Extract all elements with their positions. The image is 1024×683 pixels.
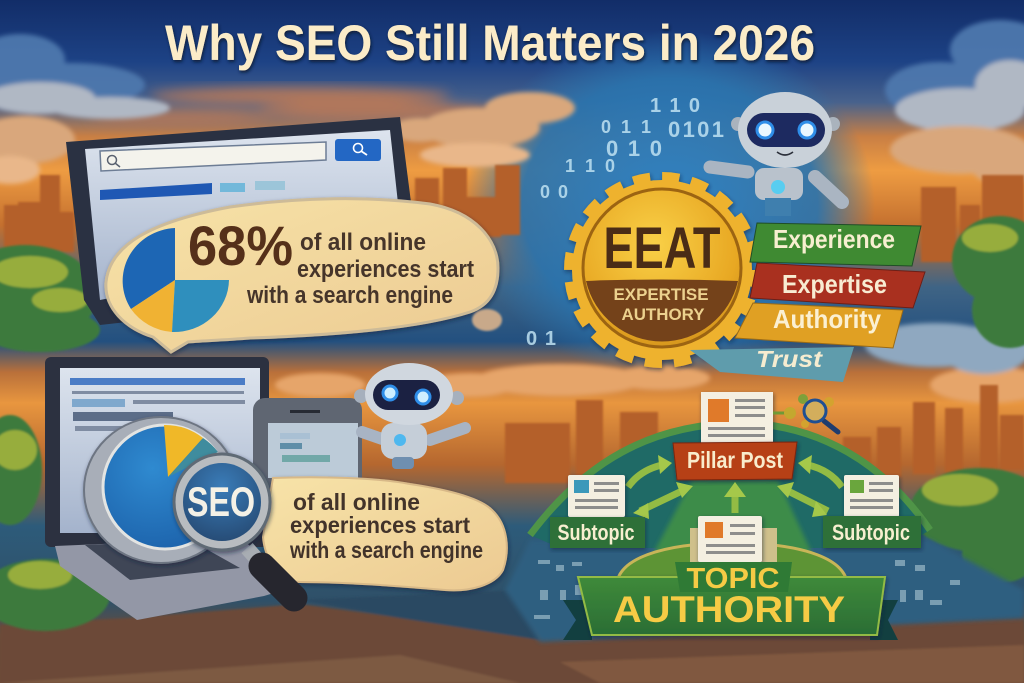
small cloud	[472, 309, 502, 331]
statistic caption	[289, 489, 483, 563]
panel: SEO devices	[45, 357, 507, 620]
icon: search button	[335, 139, 381, 161]
gold seal	[570, 178, 754, 362]
ribbon: Authority	[735, 303, 903, 348]
document: subtopic right	[844, 475, 899, 517]
document: pillar	[701, 392, 773, 444]
statistic caption: experiences start	[297, 256, 474, 283]
ribbon: Experience	[750, 223, 921, 266]
magnifier handle	[247, 548, 294, 598]
banner: topic authority: AUTHORITY	[613, 589, 845, 630]
binary digits: 0 0	[540, 182, 568, 202]
laptop	[45, 357, 300, 620]
statistic caption: with a search engine	[289, 537, 483, 563]
title: Why SEO Still Matters in 2026	[165, 15, 815, 71]
panel: search statistic	[66, 117, 502, 352]
background: city skyline	[4, 165, 1024, 483]
ribbon: Trust: Trust	[756, 346, 824, 372]
panel: topic cluster	[505, 392, 1024, 642]
green hill	[530, 423, 930, 548]
binary digits: 0 1 1	[601, 117, 651, 137]
phone	[253, 398, 362, 488]
center green glow	[650, 480, 815, 560]
background: sunset streaks	[90, 87, 500, 125]
SEO lens	[174, 454, 270, 550]
green arc	[617, 543, 847, 585]
gold seal: EXPERTISE	[614, 285, 708, 304]
banner: topic authority: TOPIC	[686, 563, 780, 595]
speech bubble	[106, 199, 498, 352]
gold seal: AUTHORY	[622, 305, 705, 324]
arrows	[628, 455, 842, 519]
statistic caption	[246, 229, 474, 309]
statistic caption: with a search engine	[246, 282, 453, 309]
pie chart	[123, 228, 229, 332]
statistic caption: experiences start	[290, 512, 470, 538]
banner: topic authority	[563, 562, 898, 640]
monitor with search page	[66, 117, 415, 325]
pie magnifier	[84, 417, 238, 563]
binary digits	[526, 95, 724, 350]
binary digits: 0 1	[526, 328, 556, 350]
binary digits: 0 1 0	[606, 136, 662, 161]
speech bubble	[263, 477, 507, 590]
label: Pillar Post	[673, 442, 797, 480]
document: center	[698, 516, 762, 562]
statistic caption: of all online	[293, 489, 420, 515]
panel: EEAT badge and ribbons	[570, 178, 925, 382]
label: Subtopic right: Subtopic	[832, 520, 910, 545]
circuit ground	[505, 540, 1024, 642]
background: digital glow	[465, 30, 875, 380]
ribbon: Expertise: Expertise	[782, 269, 887, 299]
ribbon: Experience: Experience	[773, 224, 895, 254]
background: paved ground	[0, 590, 1024, 683]
binary digits: 1 1 0	[650, 95, 700, 117]
document: subtopic left	[568, 475, 625, 517]
ribbon: Trust	[690, 346, 854, 382]
ribbon: Expertise	[750, 263, 925, 308]
ribbon: Authority: Authority	[773, 304, 881, 334]
label: Pillar Post: Pillar Post	[687, 447, 783, 473]
search field	[100, 142, 326, 171]
binary digits: 1 1 0	[565, 156, 615, 176]
icon: upper robot	[710, 92, 842, 216]
label: Subtopic right	[823, 516, 921, 548]
background: trees	[0, 216, 1024, 631]
document envelope	[690, 528, 777, 562]
binary digits: 0 1 0 1	[668, 117, 724, 142]
icon: lower robot	[354, 363, 465, 469]
background: clouds	[0, 20, 1024, 403]
statistic 68%: 68%	[188, 214, 293, 277]
statistic caption: of all online	[300, 229, 426, 256]
icon: small magnifier	[773, 394, 838, 432]
gold seal: EEAT	[604, 216, 720, 281]
SEO lens: SEO	[187, 478, 255, 525]
label: Subtopic left: Subtopic	[558, 520, 634, 545]
